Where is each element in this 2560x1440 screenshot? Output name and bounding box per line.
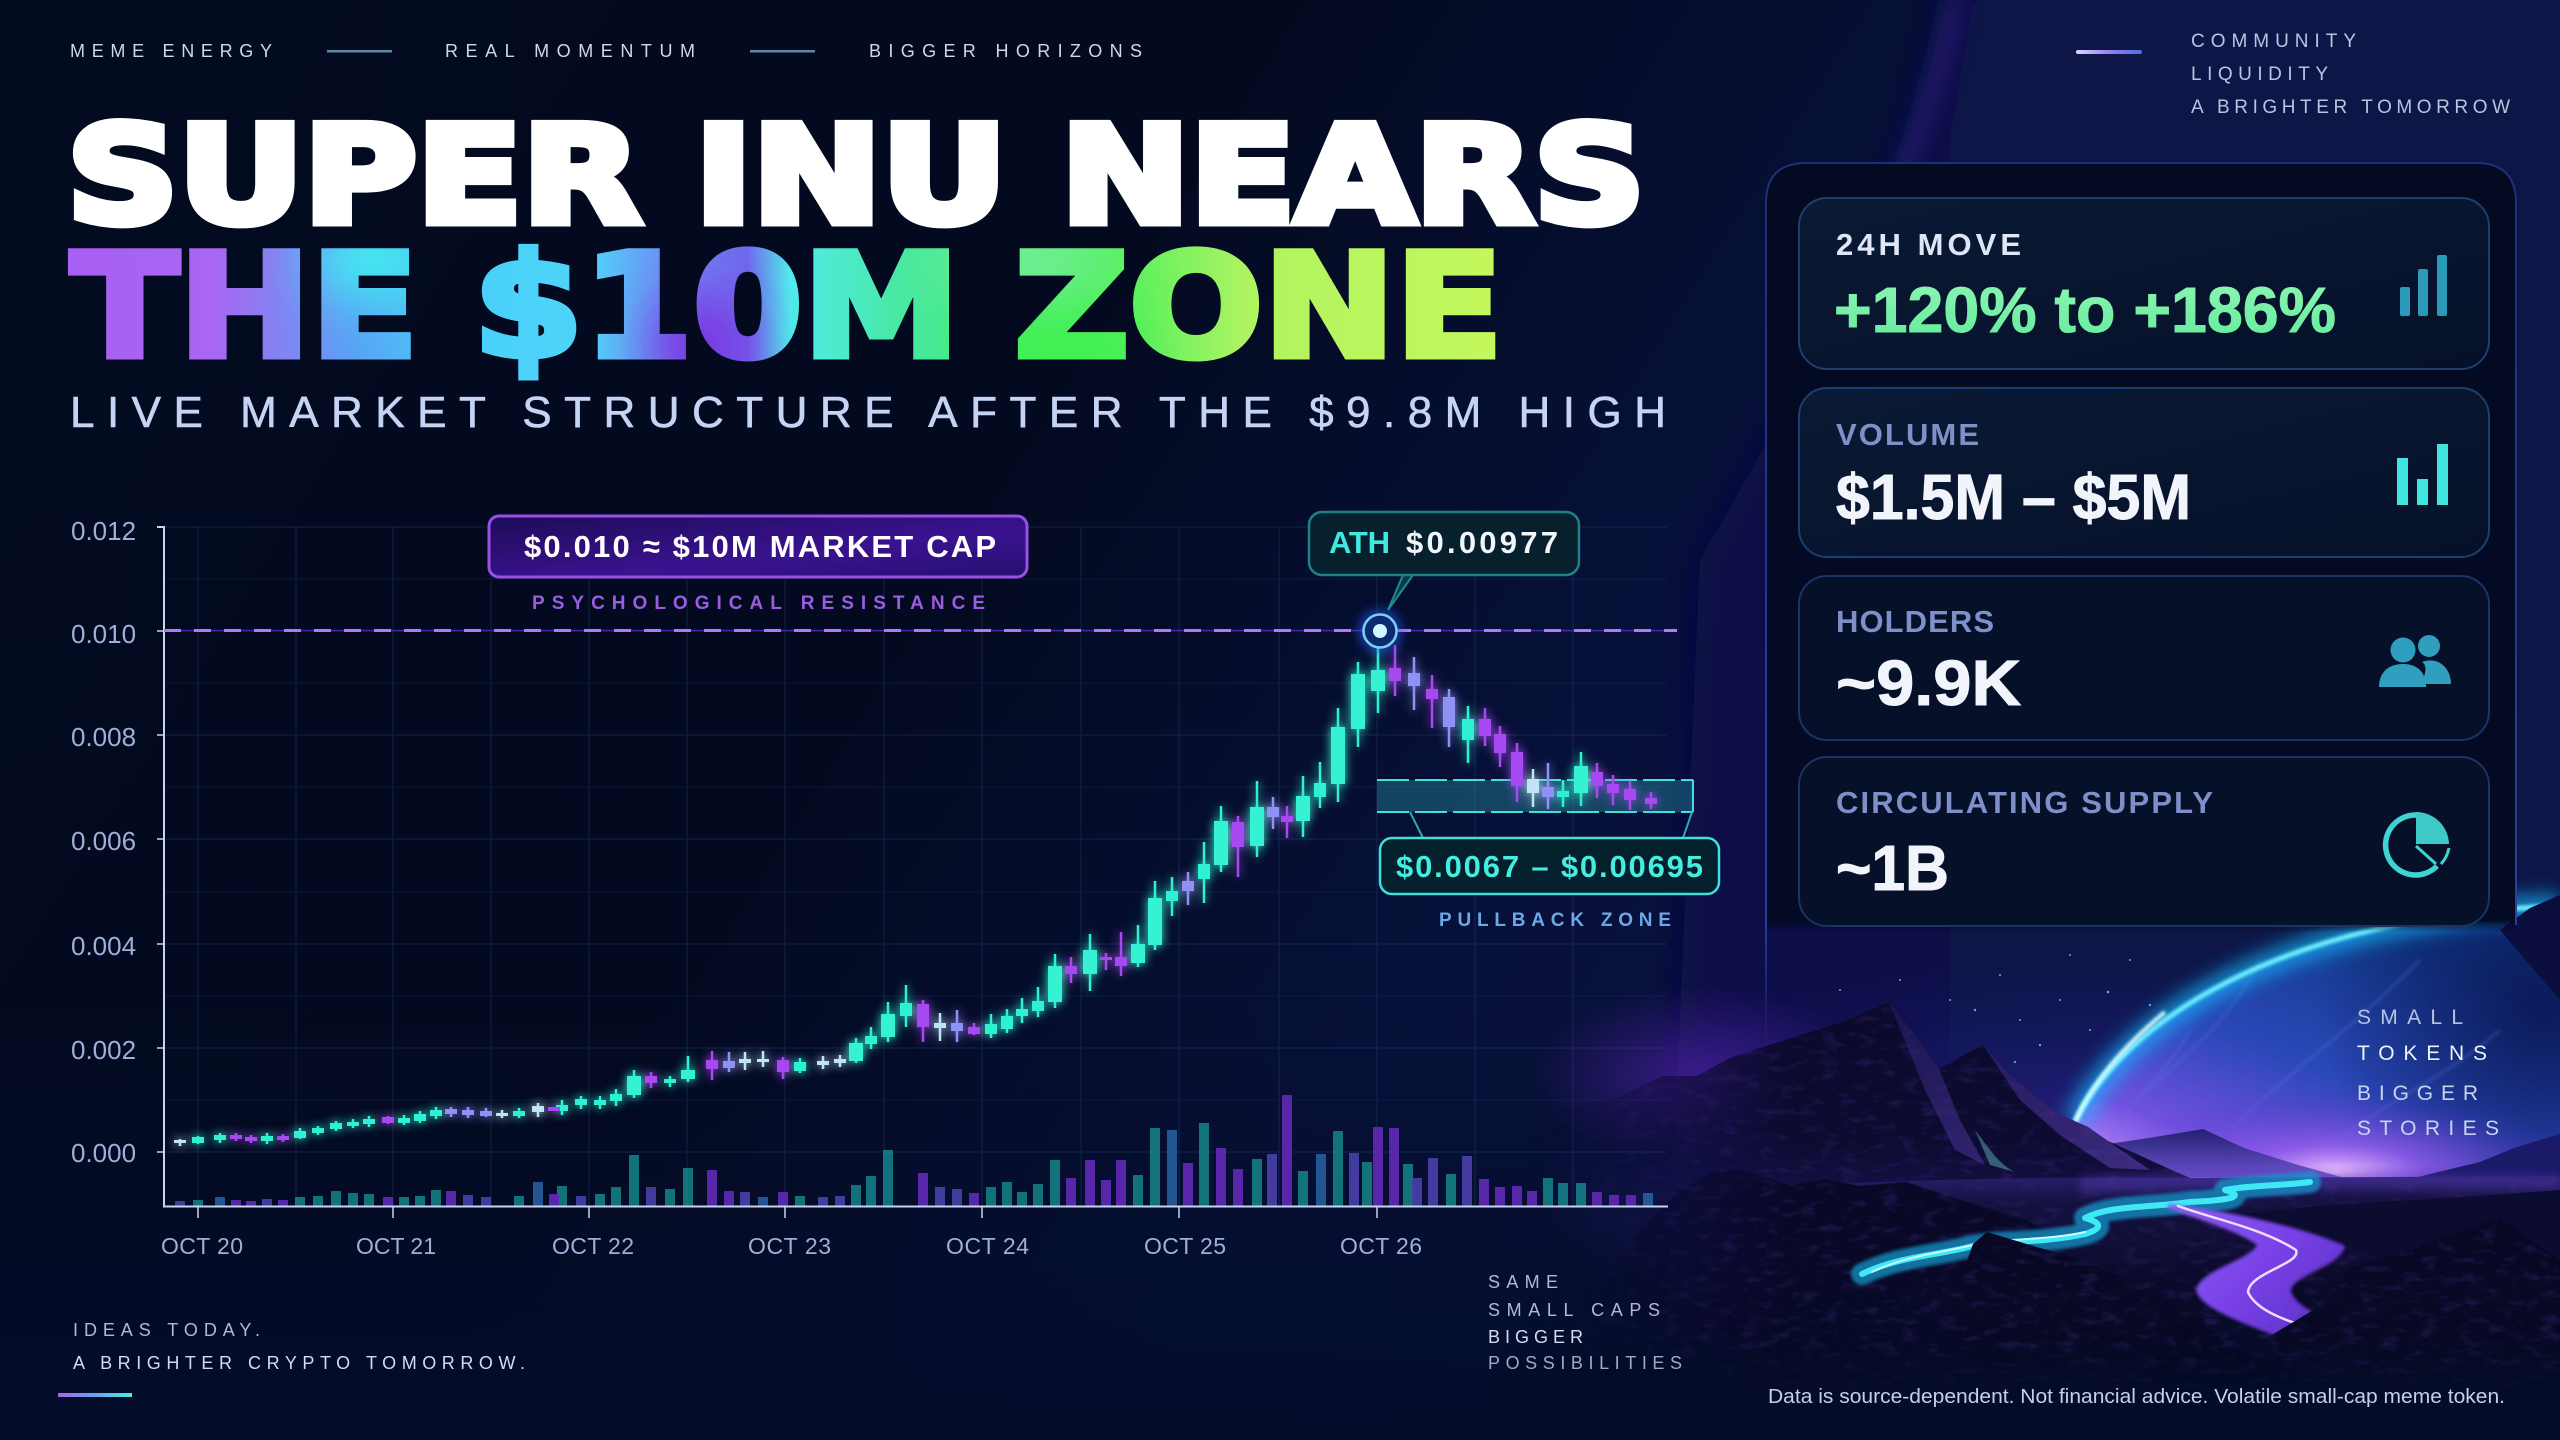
y axis labels: 0.004	[71, 931, 136, 961]
card: holders: ~9.9K	[1836, 647, 2021, 719]
sky glow	[1530, 950, 2560, 1410]
callout: psychological resistance: $0.010 ≈ $10M MARKET CAP	[524, 529, 996, 564]
top strip	[70, 41, 1142, 61]
x axis labels: OCT 23	[748, 1233, 831, 1259]
side note: small tokens: STORIES	[2357, 1117, 2499, 1140]
bottom center note: BIGGER	[1488, 1327, 1583, 1347]
axes	[157, 527, 1668, 1218]
x axis labels: OCT 20	[161, 1233, 243, 1259]
terrain	[1592, 1002, 2560, 1371]
y axis labels: 0.002	[71, 1035, 136, 1065]
card: 24h move	[1799, 198, 2489, 369]
dark hills	[1646, 1167, 2043, 1270]
x axis labels: OCT 26	[1340, 1233, 1422, 1259]
card: circulating supply	[1799, 757, 2489, 926]
right midground	[2239, 1190, 2560, 1258]
note text: LIQUIDITY	[2191, 64, 2328, 85]
callout: psychological resistance: PSYCHOLOGICAL RESISTANCE	[532, 593, 985, 614]
side note: small tokens	[2357, 1006, 2499, 1140]
far ridge	[2090, 1129, 2352, 1180]
headline line 1: SUPER INU NEARS	[67, 98, 1645, 254]
icon: people	[2379, 635, 2451, 687]
divider	[327, 50, 392, 52]
chart	[71, 512, 1719, 1259]
stats panel	[1766, 163, 2516, 1050]
side note: small tokens: BIGGER	[2357, 1082, 2478, 1105]
bottom center note	[1488, 1272, 1682, 1373]
icon: rising bars	[2400, 255, 2447, 316]
icon: pie chart	[2386, 812, 2449, 875]
horizon glow	[2085, 1092, 2560, 1252]
y axis labels: 0.006	[71, 826, 136, 856]
callout: pullback zone: PULLBACK ZONE	[1439, 910, 1671, 931]
bottom center note: SMALL CAPS	[1488, 1300, 1660, 1320]
headline line 2: THE $10M ZONE	[71, 223, 1503, 390]
callout: ATH	[1309, 512, 1579, 610]
card: 24h move: +120% to +186%	[1834, 274, 2336, 346]
bottom fade	[1500, 1340, 2560, 1440]
disclaimer: Data is source-dependent. Not financial advice. Volatile small-cap meme token.	[1768, 1385, 2505, 1408]
volume bars	[180, 1095, 1648, 1206]
planet	[2075, 906, 2560, 1180]
card: circulating supply: ~1B	[1836, 832, 1949, 904]
note text: A BRIGHTER TOMORROW	[2191, 97, 2510, 118]
card: volume	[1799, 388, 2489, 557]
bottom left note: A BRIGHTER CRYPTO TOMORROW.	[73, 1353, 525, 1373]
card: circulating supply: CIRCULATING SUPPLY	[1836, 785, 2213, 820]
icon: volume bars	[2397, 444, 2448, 505]
right ridge	[2400, 1134, 2560, 1190]
pullback zone	[1377, 780, 1693, 838]
callout: pullback zone	[1380, 838, 1719, 931]
bottom left note	[58, 1320, 525, 1397]
cyan river	[1862, 1182, 2310, 1274]
bottom center note: SAME	[1488, 1272, 1558, 1292]
side note: small tokens: SMALL	[2357, 1006, 2463, 1029]
y axis labels: 0.010	[71, 619, 136, 649]
top right note	[2076, 31, 2510, 118]
y axis labels: 0.000	[71, 1138, 136, 1168]
resistance line	[164, 630, 1677, 632]
purple river	[2168, 1204, 2385, 1342]
bottom center note: POSSIBILITIES	[1488, 1353, 1682, 1373]
landscape illustration	[1500, 895, 2560, 1440]
horizon haze	[2080, 1173, 2560, 1192]
bottom left note: IDEAS TODAY.	[73, 1320, 260, 1340]
callout: ATH: $0.00977	[1406, 525, 1558, 560]
x axis labels: OCT 24	[946, 1233, 1029, 1259]
ATH marker	[1358, 609, 1402, 653]
panel frame	[1766, 163, 2516, 932]
callout: ATH: ATH	[1329, 525, 1390, 560]
title	[67, 98, 1666, 437]
accent line	[2076, 50, 2142, 54]
card: holders	[1799, 576, 2489, 740]
note text	[2191, 31, 2510, 118]
grid	[164, 527, 1667, 1206]
mountain lit faces	[1889, 1002, 2150, 1170]
y axis labels: 0.008	[71, 722, 136, 752]
side note: small tokens: TOKENS	[2357, 1042, 2487, 1065]
note text: COMMUNITY	[2191, 31, 2356, 52]
x axis labels	[161, 1233, 1422, 1259]
text: meme energy: MEME ENERGY	[70, 41, 272, 61]
card: holders: HOLDERS	[1836, 604, 1994, 639]
callout: pullback zone: $0.0067 – $0.00695	[1396, 849, 1703, 884]
card: volume: VOLUME	[1836, 417, 1979, 452]
ground	[1607, 1176, 2560, 1371]
x axis labels: OCT 22	[552, 1233, 634, 1259]
card: 24h move: 24H MOVE	[1836, 227, 2021, 262]
foreground rocks	[1730, 1217, 2560, 1400]
main mountains	[1592, 1002, 2190, 1186]
text: bigger horizons: BIGGER HORIZONS	[869, 41, 1142, 61]
subtitle: LIVE MARKET STRUCTURE AFTER THE $9.8M HIGH	[70, 388, 1666, 437]
x axis labels: OCT 21	[356, 1233, 436, 1259]
stars	[1839, 954, 2151, 1063]
y axis labels: 0.012	[71, 516, 136, 546]
callout: psychological resistance	[489, 516, 1027, 614]
accent line	[58, 1393, 132, 1397]
x axis labels: OCT 25	[1144, 1233, 1226, 1259]
candlesticks	[180, 645, 1651, 1146]
right top peak	[2500, 895, 2560, 1000]
y axis labels	[71, 516, 136, 1168]
text: real momentum: REAL MOMENTUM	[445, 41, 695, 61]
divider	[750, 50, 815, 52]
card: volume: $1.5M – $5M	[1836, 461, 2191, 533]
